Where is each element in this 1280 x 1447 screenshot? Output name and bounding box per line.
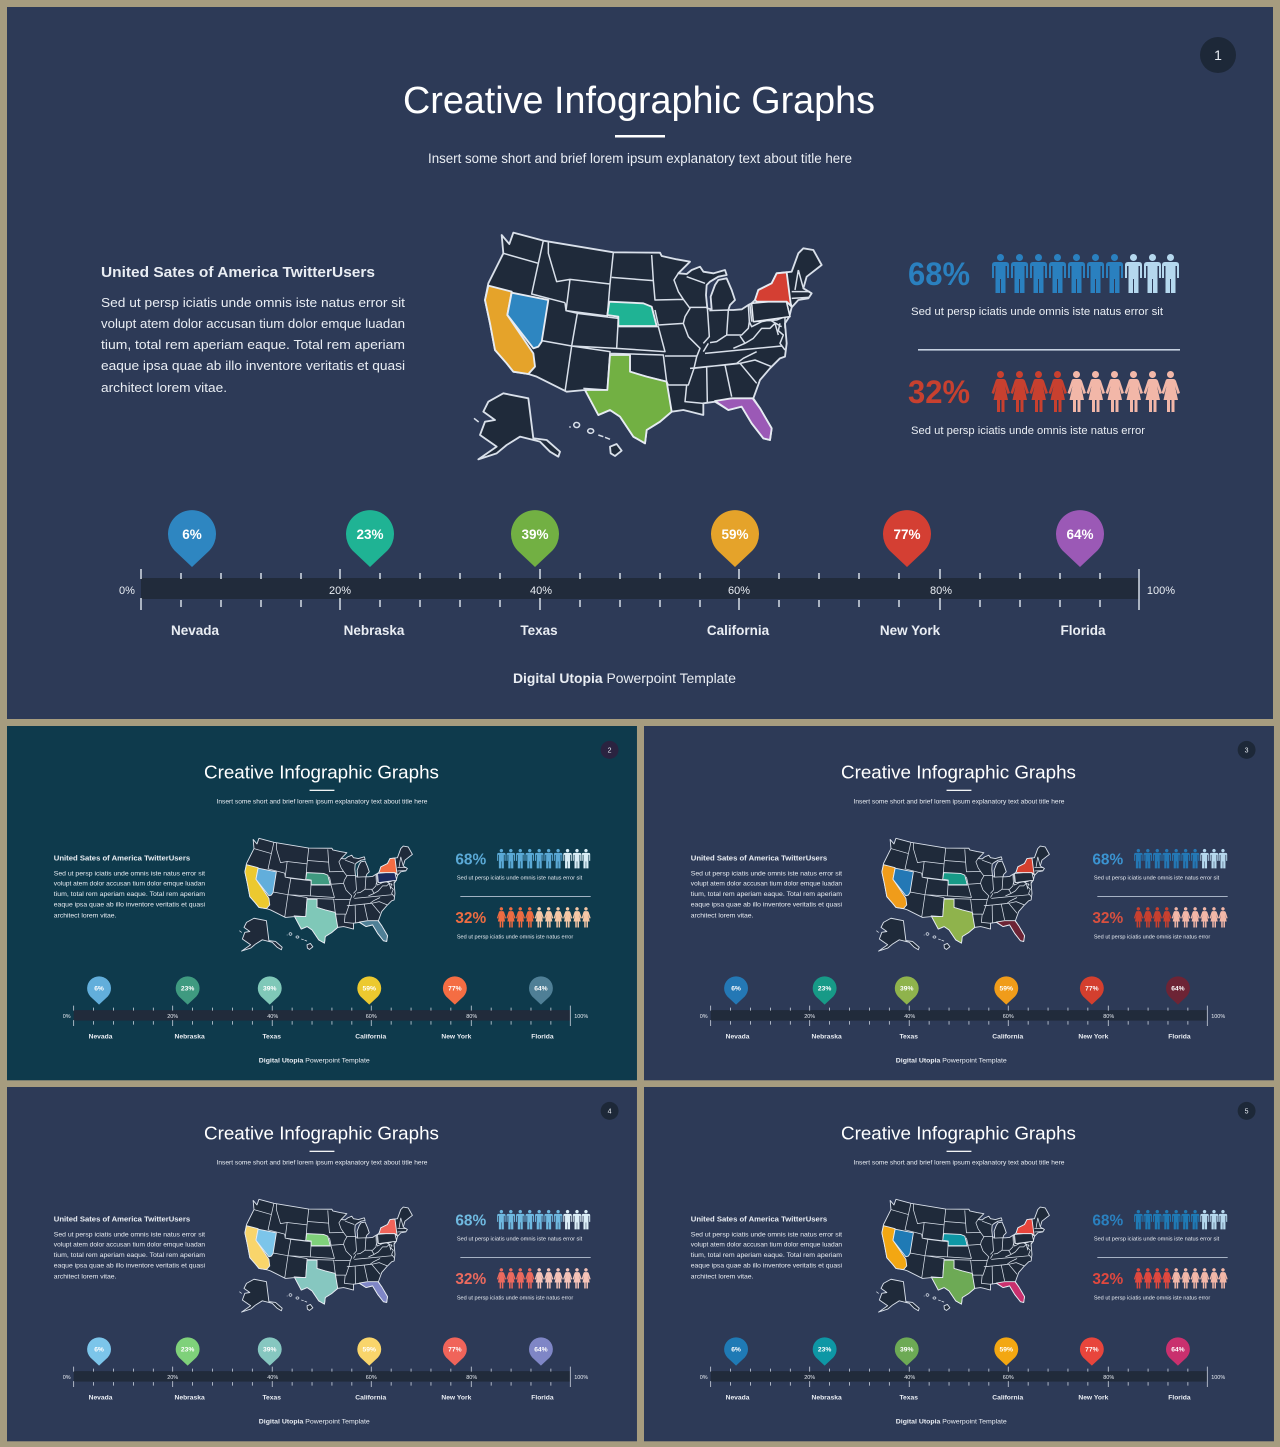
pin: Florida: Florida [1168,1394,1191,1401]
page number badge: 2 [608,747,612,754]
percentage axis [700,1006,1225,1026]
text block: USA Twitter users: architect lorem vitae. [691,1274,754,1281]
percentage axis: 100% [1211,1014,1225,1020]
page number badge [601,1102,619,1120]
pin: California [992,976,1023,1040]
footer: Digital Utopia Powerpoint Template [896,1418,1007,1425]
text block: USA Twitter users: volupt atem dolor accusan tium dolor emque luadan [691,1242,842,1249]
stat: 32% women [1092,907,1228,940]
text block: USA Twitter users: Sed ut persp iciatis unde omnis iste natus error sit [691,1231,842,1238]
pin: Florida: Florida [531,1033,554,1040]
stat: 32% women: 32% [455,910,486,927]
pin: New York [441,1337,472,1401]
pin: Nebraska: Nebraska [812,1033,842,1040]
percentage axis: 20% [804,1014,815,1020]
text block: USA Twitter users [54,1214,205,1281]
subtitle: Insert some short and brief lorem ipsum explanatory text about title here [216,799,428,806]
pin: Nebraska: Nebraska [812,1394,842,1401]
US map [239,1199,412,1312]
pin: California: 59% [363,1347,376,1354]
pin: New York: 77% [448,986,462,993]
pin: New York: New York [880,623,941,638]
title: Creative Infographic Graphs [841,1124,1076,1145]
pin: Florida: 64% [1171,1347,1185,1354]
percentage axis: 80% [1103,1014,1114,1020]
stat: 32% women [455,907,591,940]
pin: Nevada: 6% [731,1347,741,1354]
pin: Nebraska [175,976,205,1040]
footer: Digital Utopia Powerpoint Template [513,671,736,686]
pin: Texas: 39% [263,986,276,993]
pin: New York [880,510,941,638]
pin: Nebraska: 23% [818,986,831,993]
footer: Digital Utopia Powerpoint Template [896,1057,1007,1064]
slide 1: main [7,7,1273,719]
stat: 68% men: 68% [1092,1212,1123,1229]
pin: New York [441,976,472,1040]
percentage axis: 100% [1211,1375,1225,1381]
pin: New York [1078,976,1109,1040]
slide 5: vivid theme [644,1087,1274,1441]
percentage axis: 60% [728,585,750,597]
percentage axis [700,1367,1225,1387]
percentage axis: 20% [329,585,351,597]
text block: USA Twitter users: tium, total rem aperiam eaque. Total rem aperiam [54,891,205,898]
percentage axis: 20% [804,1375,815,1381]
page number badge [601,741,619,759]
pin: Texas: Texas [520,623,558,638]
percentage axis: 20% [167,1375,178,1381]
text block: USA Twitter users: eaque ipsa quae ab illo inventore veritatis et quasi [101,358,405,373]
pin: California: 59% [721,527,749,542]
pin: Florida: 64% [534,1347,548,1354]
stat: 68% men: Sed ut persp iciatis unde omnis iste natus error sit [457,1236,583,1242]
subtitle: Insert some short and brief lorem ipsum explanatory text about title here [853,1160,1065,1167]
pin: Florida: Florida [1060,623,1106,638]
US map [239,838,412,951]
page number badge [1238,741,1256,759]
pin: Texas: 39% [900,986,913,993]
pin: Texas: Texas [899,1033,918,1040]
text block: USA Twitter users: architect lorem vitae. [54,1274,117,1281]
stat: 32% women: Sed ut persp iciatis unde omnis iste natus error [457,1295,573,1301]
pin: Nevada [87,1337,113,1401]
stat: 32% women: 32% [1092,1271,1123,1288]
pin: Nebraska: 23% [356,527,384,542]
text block: USA Twitter users: United Sates of America TwitterUsers [101,264,375,281]
text block: USA Twitter users: volupt atem dolor accusan tium dolor emque luadan [54,1242,205,1249]
page number badge: 5 [1245,1108,1249,1115]
pin: Florida: Florida [1168,1033,1191,1040]
pin: Texas [895,1337,919,1401]
stat: 32% women: Sed ut persp iciatis unde omnis iste natus error [911,425,1145,437]
text block: USA Twitter users: volupt atem dolor accusan tium dolor emque luadan [54,881,205,888]
page number badge [1200,37,1236,73]
percentage axis: 80% [466,1375,477,1381]
subtitle: Insert some short and brief lorem ipsum explanatory text about title here [428,151,852,166]
pin: Florida: 64% [534,986,548,993]
pin: Texas: Texas [262,1033,281,1040]
text block: USA Twitter users: United Sates of America TwitterUsers [54,1214,190,1223]
percentage axis: 40% [904,1375,915,1381]
pin: California: 59% [1000,986,1013,993]
percentage axis: 40% [267,1375,278,1381]
pin: Texas: Texas [262,1394,281,1401]
pin: Texas: 39% [263,1347,276,1354]
subtitle: Insert some short and brief lorem ipsum explanatory text about title here [216,1160,428,1167]
text block: USA Twitter users: Sed ut persp iciatis unde omnis iste natus error sit [54,1231,205,1238]
pin: Nebraska: 23% [181,986,194,993]
pin: Nevada: 6% [731,986,741,993]
percentage axis: 100% [1147,585,1175,597]
stat: 32% women [455,1268,591,1301]
pin: Nebraska [344,510,405,638]
stat: 32% women: Sed ut persp iciatis unde omnis iste natus error [457,934,573,940]
percentage axis: 0% [700,1014,708,1020]
title: Creative Infographic Graphs [204,1124,439,1145]
page number badge [1238,1102,1256,1120]
footer: Digital Utopia Powerpoint Template [259,1057,370,1064]
pin: Texas: 39% [900,1347,913,1354]
text block: USA Twitter users [691,853,842,920]
pin: Nevada: Nevada [726,1033,750,1040]
pin: Nebraska [812,976,842,1040]
pin: Nevada [87,976,113,1040]
text block: USA Twitter users: Sed ut persp iciatis unde omnis iste natus error sit [101,295,405,310]
stat: 68% men: 68% [1092,851,1123,868]
pin: Nebraska: Nebraska [175,1033,205,1040]
subtitle: Insert some short and brief lorem ipsum explanatory text about title here [853,799,1065,806]
pin: Texas [895,976,919,1040]
percentage axis: 60% [366,1375,377,1381]
pin: Nebraska: 23% [818,1347,831,1354]
pin: New York: New York [441,1033,472,1040]
pin: New York: 77% [448,1347,462,1354]
slide 2: teal theme [7,726,637,1080]
percentage axis: 0% [63,1375,71,1381]
percentage axis: 80% [1103,1375,1114,1381]
pin: Nebraska: Nebraska [175,1394,205,1401]
percentage axis: 40% [530,585,552,597]
stat: 68% men [908,254,1179,318]
pin: Nevada [724,1337,750,1401]
page number badge: 1 [1214,47,1222,63]
US map [474,233,822,459]
pin: New York: New York [1078,1033,1109,1040]
title: Creative Infographic Graphs [841,763,1076,784]
pin: California: California [355,1033,386,1040]
pin: Nevada: 6% [94,1347,104,1354]
stat: 32% women: 32% [1092,910,1123,927]
stat: 68% men: 68% [455,851,486,868]
percentage axis: 60% [1003,1375,1014,1381]
pin: Florida [1056,510,1106,638]
pin: Florida: Florida [531,1394,554,1401]
percentage axis: 20% [167,1014,178,1020]
text block: USA Twitter users [691,1214,842,1281]
pin: Nevada: Nevada [171,623,220,638]
pin: Florida: 64% [1066,527,1094,542]
stat: 32% women: 32% [908,374,970,410]
text block: USA Twitter users: eaque ipsa quae ab illo inventore veritatis et quasi [691,902,842,909]
pin: Nevada: 6% [182,527,202,542]
pin: California: 59% [1000,1347,1013,1354]
percentage axis [119,569,1175,610]
footer: Digital Utopia Powerpoint Template [259,1418,370,1425]
pin: Nevada [724,976,750,1040]
text block: USA Twitter users: eaque ipsa quae ab illo inventore veritatis et quasi [54,902,205,909]
text block: USA Twitter users: eaque ipsa quae ab illo inventore veritatis et quasi [54,1263,205,1270]
stat: 68% men: Sed ut persp iciatis unde omnis iste natus error sit [911,306,1163,318]
text block: USA Twitter users: volupt atem dolor accusan tium dolor emque luadan [691,881,842,888]
stat: 68% men: Sed ut persp iciatis unde omnis iste natus error sit [1094,1236,1220,1242]
page number badge: 4 [608,1108,612,1115]
percentage axis: 60% [366,1014,377,1020]
pin: Florida [1166,976,1191,1040]
percentage axis [63,1367,588,1387]
percentage axis: 0% [63,1014,71,1020]
pin: Nevada: Nevada [89,1033,113,1040]
percentage axis [63,1006,588,1026]
stat: 68% men [455,849,590,881]
pin: Texas: 39% [521,527,549,542]
pin: Florida: 64% [1171,986,1185,993]
pin: Nevada: Nevada [89,1394,113,1401]
percentage axis: 0% [700,1375,708,1381]
stat: 68% men: Sed ut persp iciatis unde omnis iste natus error sit [1094,875,1220,881]
pin: California [355,1337,386,1401]
pin: Nebraska: 23% [181,1347,194,1354]
title: Creative Infographic Graphs [403,80,875,122]
pin: New York: New York [441,1394,472,1401]
pin: California: California [992,1033,1023,1040]
percentage axis: 80% [930,585,952,597]
pin: Nebraska [812,1337,842,1401]
text block: USA Twitter users: Sed ut persp iciatis unde omnis iste natus error sit [691,870,842,877]
pin: Texas: Texas [899,1394,918,1401]
slide 3: warm navy theme [644,726,1274,1080]
pin: Nebraska [175,1337,205,1401]
text block: USA Twitter users: volupt atem dolor accusan tium dolor emque luadan [101,316,405,331]
text block: USA Twitter users: tium, total rem aperiam eaque. Total rem aperiam [54,1252,205,1259]
percentage axis: 40% [267,1014,278,1020]
stat: 68% men: 68% [908,256,970,292]
stat: 32% women: 32% [455,1271,486,1288]
stat: 32% women [908,371,1180,437]
pin: California: California [355,1394,386,1401]
text block: USA Twitter users: eaque ipsa quae ab illo inventore veritatis et quasi [691,1263,842,1270]
percentage axis: 100% [574,1375,588,1381]
text block: USA Twitter users: architect lorem vitae. [54,913,117,920]
pin: California [707,510,770,638]
pin: California [355,976,386,1040]
pin: Nevada [168,510,220,638]
pin: New York: 77% [1085,1347,1099,1354]
pin: Florida [529,1337,554,1401]
slide 4: pastel theme [7,1087,637,1441]
pin: New York: 77% [893,527,921,542]
pin: California: California [992,1394,1023,1401]
text block: USA Twitter users: architect lorem vitae. [101,380,227,395]
stat: 32% women: Sed ut persp iciatis unde omnis iste natus error [1094,1295,1210,1301]
page number badge: 3 [1245,747,1249,754]
text block: USA Twitter users: Sed ut persp iciatis unde omnis iste natus error sit [54,870,205,877]
pin: Florida [1166,1337,1191,1401]
text block: USA Twitter users: tium, total rem aperiam eaque. Total rem aperiam [101,337,405,352]
stat: 68% men: 68% [455,1212,486,1229]
stat: 68% men [455,1210,590,1242]
US map [876,1199,1049,1312]
percentage axis: 100% [574,1014,588,1020]
pin: Nevada: 6% [94,986,104,993]
stat: 68% men [1092,849,1227,881]
text block: USA Twitter users: United Sates of America TwitterUsers [691,853,827,862]
stat: 32% women [1092,1268,1228,1301]
pin: New York: 77% [1085,986,1099,993]
pin: California [992,1337,1023,1401]
pin: Texas [258,1337,282,1401]
title: Creative Infographic Graphs [204,763,439,784]
US map [876,838,1049,951]
percentage axis: 80% [466,1014,477,1020]
text block: USA Twitter users: United Sates of America TwitterUsers [54,853,190,862]
pin: Nebraska: Nebraska [344,623,405,638]
stat: 32% women: Sed ut persp iciatis unde omnis iste natus error [1094,934,1210,940]
pin: California: California [707,623,770,638]
pin: New York: New York [1078,1394,1109,1401]
stat: 68% men [1092,1210,1227,1242]
pin: Texas [511,510,559,638]
percentage axis: 40% [904,1014,915,1020]
pin: Florida [529,976,554,1040]
pin: California: 59% [363,986,376,993]
pin: Texas [258,976,282,1040]
pin: Nevada: Nevada [726,1394,750,1401]
text block: USA Twitter users: United Sates of America TwitterUsers [691,1214,827,1223]
text block: USA Twitter users [54,853,205,920]
text block: USA Twitter users: tium, total rem aperiam eaque. Total rem aperiam [691,1252,842,1259]
text block: USA Twitter users [101,264,405,395]
text block: USA Twitter users: architect lorem vitae. [691,913,754,920]
text block: USA Twitter users: tium, total rem aperiam eaque. Total rem aperiam [691,891,842,898]
pin: New York [1078,1337,1109,1401]
percentage axis: 0% [119,585,135,597]
stat: 68% men: Sed ut persp iciatis unde omnis iste natus error sit [457,875,583,881]
percentage axis: 60% [1003,1014,1014,1020]
